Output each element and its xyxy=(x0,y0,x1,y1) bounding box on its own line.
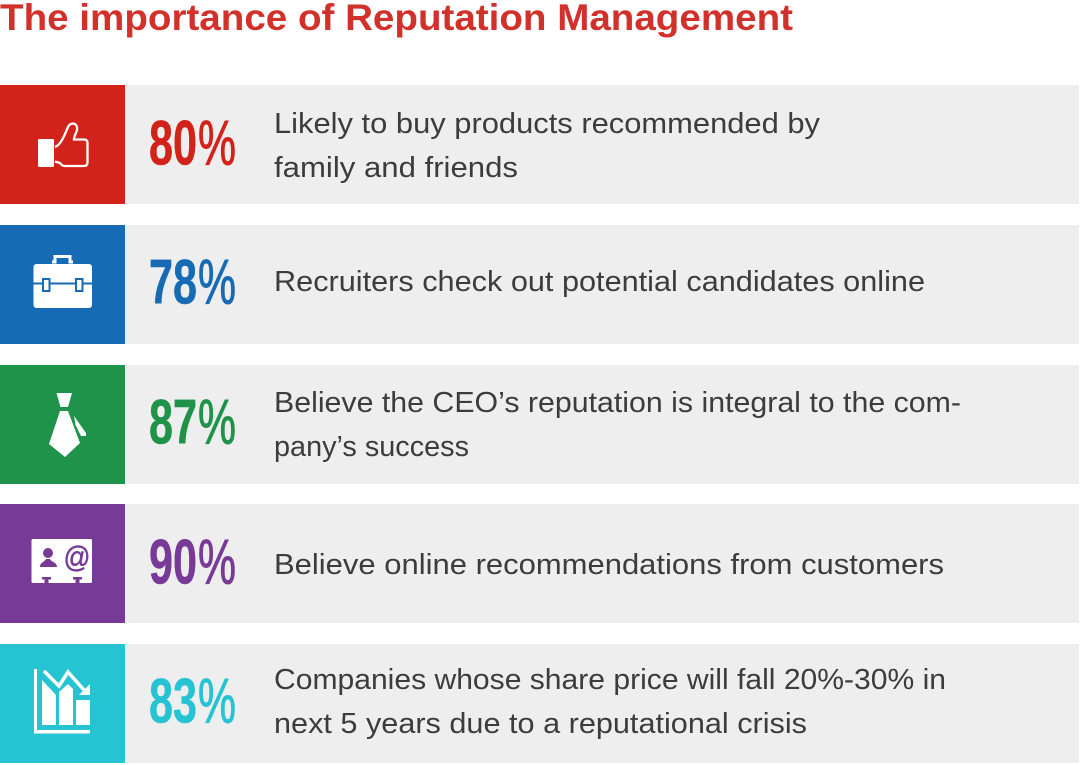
text: family and friends: family and friends xyxy=(274,152,518,184)
panel: 78% recruiters xyxy=(0,225,1079,344)
panel: 83% share price xyxy=(0,644,1079,763)
stat: 90%: % xyxy=(198,528,236,598)
stat: 78%: 78 xyxy=(149,248,197,318)
text: CEO reputation: Believe the CEO’s reputation is integral to the com- xyxy=(274,387,961,419)
stat: 83%: 83 xyxy=(149,666,197,736)
icon: contact card xyxy=(32,539,92,583)
stat: 80%: % xyxy=(198,108,236,178)
stat: 90%: 90 xyxy=(149,528,197,598)
text: share price: Companies whose share price will fall 20%-30% in xyxy=(274,664,946,696)
icon: briefcase xyxy=(34,256,92,308)
panel: 80% family and friends xyxy=(0,85,1079,204)
text: family and friends: Likely to buy products recommended by xyxy=(274,108,821,140)
text: online recommendations: Believe online recommendations from customers xyxy=(274,549,944,581)
text: CEO reputation: pany’s success xyxy=(274,431,469,463)
stat: 87%: 87 xyxy=(149,388,197,458)
panel: 87% CEO reputation xyxy=(0,365,1079,484)
icon: thumbs up xyxy=(38,124,88,167)
icon: falling chart xyxy=(34,669,90,734)
stat: 87%: % xyxy=(198,388,236,458)
text: share price xyxy=(274,664,946,740)
text: CEO reputation xyxy=(274,387,961,463)
stat: 83%: % xyxy=(198,666,236,736)
stat: 80%: 80 xyxy=(149,108,197,178)
text: share price: next 5 years due to a reputational crisis xyxy=(274,708,807,740)
stat: 78%: % xyxy=(198,248,236,318)
icon: necktie xyxy=(49,393,86,457)
text: family and friends xyxy=(274,108,821,184)
icon: contact card: @ xyxy=(64,541,90,574)
text: recruiters: Recruiters check out potential candidates online xyxy=(274,266,925,298)
panel: 90% online recommendations xyxy=(0,504,1079,623)
